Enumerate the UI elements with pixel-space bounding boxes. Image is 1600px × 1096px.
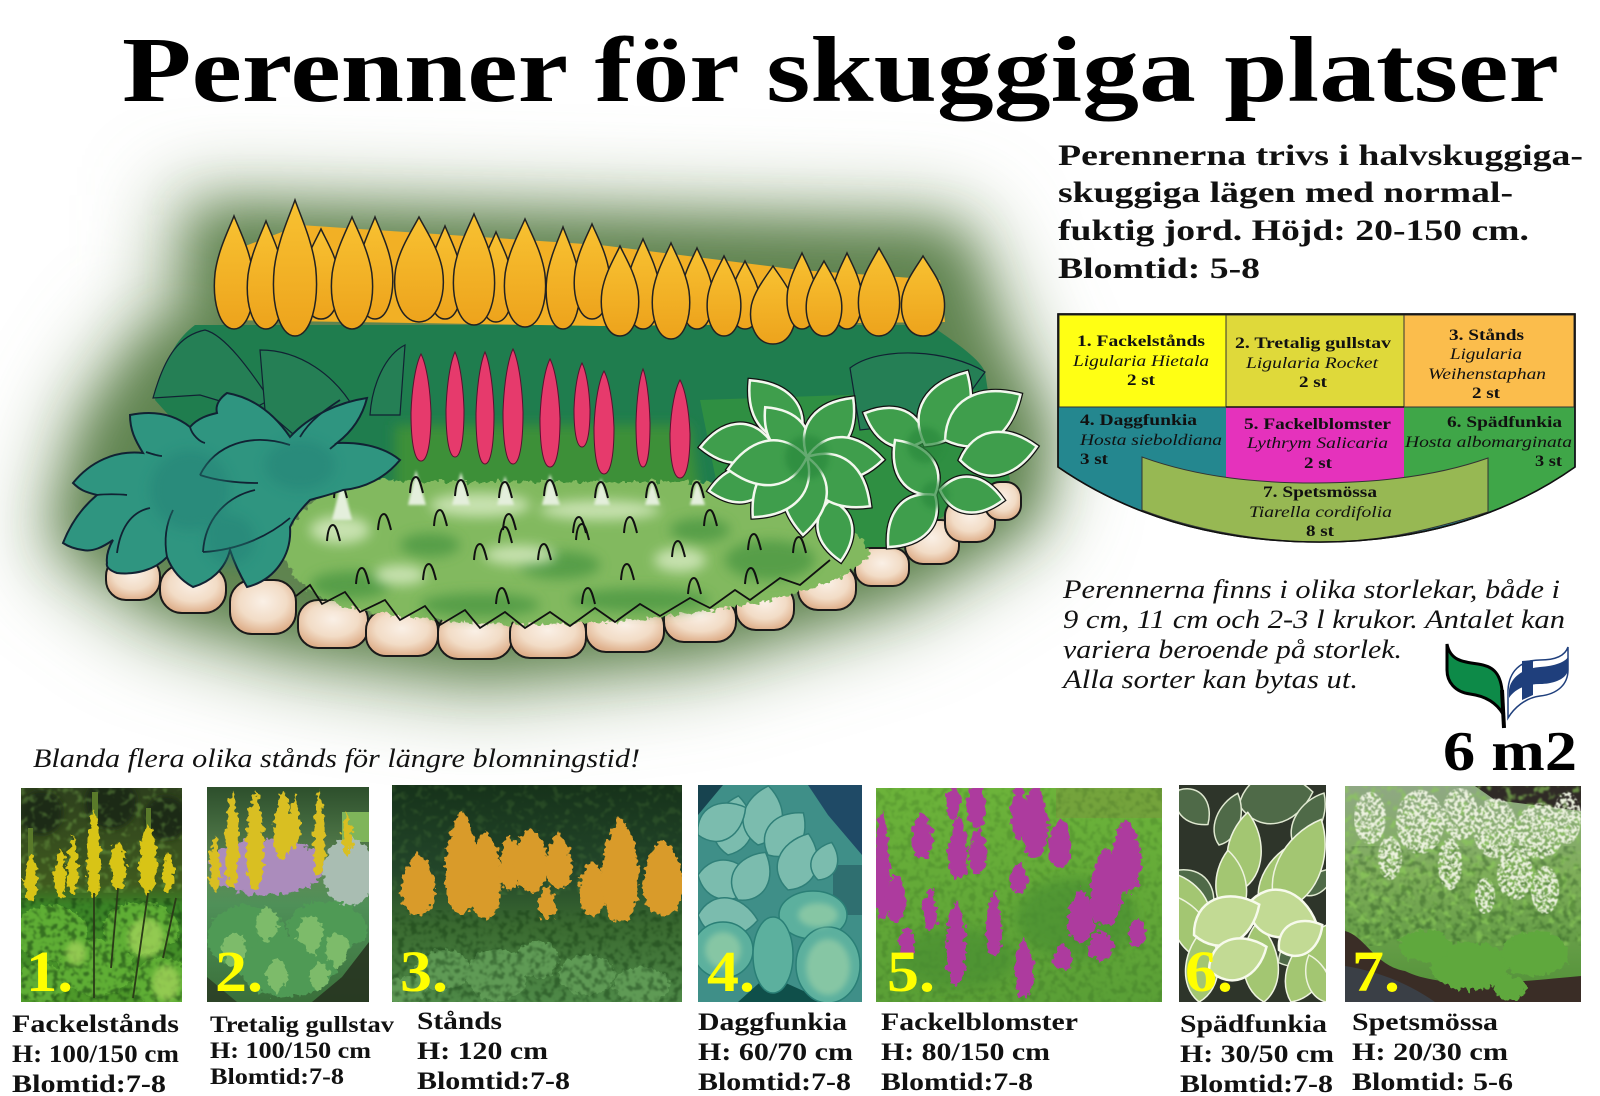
plan labels: Hosta albomarginata: [1404, 434, 1572, 451]
icon: leaf and Finnish flag logo: [1447, 644, 1568, 728]
photo 5: Fackelblomster: [874, 778, 1162, 1002]
mid green band: [395, 425, 700, 500]
bed 6 green: [1404, 407, 1574, 512]
photo 3: Stånds: [387, 785, 683, 1004]
plan labels: Ligularia: [1449, 346, 1522, 363]
caption 7: H: 20/30 cm: [1352, 1039, 1508, 1066]
caption 2: H: 100/150 cm: [210, 1038, 371, 1063]
size label: 6 m2: [1443, 721, 1577, 783]
caption 4: H: 60/70 cm: [698, 1039, 853, 1066]
plan labels: 6. Spädfunkia: [1447, 414, 1562, 431]
panel: intro text: skuggiga lägen med normal-: [1058, 176, 1513, 209]
photo numbers: 6.: [1185, 939, 1233, 1004]
plan labels: 8 st: [1306, 523, 1335, 540]
caption 6: H: 30/50 cm: [1180, 1041, 1334, 1068]
caption 3: Stånds: [417, 1008, 502, 1035]
note about pot sizes: Alla sorter kan bytas ut.: [1061, 665, 1358, 694]
photo numbers: 5.: [887, 939, 935, 1004]
planting plan diagram: [1058, 314, 1575, 542]
caption 4: Blomtid:7-8: [698, 1069, 851, 1096]
plan labels: 5. Fackelblomster: [1244, 416, 1391, 433]
plan labels: 3 st: [1535, 453, 1563, 470]
plan labels: 2. Tretalig gullstav: [1235, 335, 1391, 352]
plan labels: Ligularia Hietala: [1072, 353, 1209, 370]
photo 4: Daggfunkia: [689, 783, 862, 1003]
plan labels: Lythrym Salicaria: [1246, 435, 1388, 452]
soft green halo: [60, 215, 1040, 665]
caption 1: H: 100/150 cm: [12, 1041, 179, 1068]
dark hosta outlines at back: [153, 330, 985, 440]
plan labels: 2 st: [1472, 385, 1501, 402]
caption 5: Fackelblomster: [881, 1009, 1078, 1036]
plan labels: 3 st: [1080, 451, 1109, 468]
photo 7: Spetsmössa: [1345, 786, 1581, 1002]
plan outline: [1058, 314, 1575, 542]
dark green back band: [155, 325, 1000, 495]
photo numbers: 3.: [400, 939, 448, 1004]
caption 1: Fackelstånds: [12, 1011, 179, 1038]
photo numbers: [26, 939, 1400, 1004]
caption 2: Blomtid:7-8: [210, 1064, 344, 1089]
bed 3 orange: [1404, 315, 1574, 407]
plan labels: Ligularia Rocket: [1245, 355, 1379, 372]
caption 7: [1352, 1009, 1513, 1096]
outer pale halo: [40, 195, 1060, 695]
caption 1: [12, 1011, 179, 1096]
plan background shape: [1058, 314, 1575, 542]
caption 2: Tretalig gullstav: [210, 1012, 395, 1037]
caption 4: [698, 1009, 853, 1096]
photo numbers: 7.: [1352, 939, 1400, 1004]
plan labels: 2 st: [1304, 455, 1333, 472]
plan labels: 2 st: [1299, 374, 1328, 391]
tip text: Blanda flera olika stånds för längre blomningstid!: [33, 744, 640, 773]
note about pot sizes: Perennerna finns i olika storlekar, både i: [1062, 575, 1560, 604]
caption 6: Spädfunkia: [1180, 1011, 1328, 1038]
teal hosta: [63, 393, 400, 587]
right base foliage: [700, 390, 1010, 570]
caption 3: H: 120 cm: [417, 1038, 548, 1065]
plan labels: Weihenstaphan: [1428, 366, 1546, 383]
plan labels: 1. Fackelstånds: [1077, 333, 1205, 350]
pink flower spikes: [411, 349, 690, 478]
caption 7: Blomtid: 5-6: [1352, 1069, 1513, 1096]
caption 5: [881, 1009, 1078, 1096]
photo 2: Tretalig gullstav: [207, 787, 375, 1002]
bed 2 olive yellow: [1226, 315, 1404, 407]
caption 3: [417, 1008, 570, 1095]
photo 1: Fackelstånds: [15, 777, 189, 1009]
teal leaf shading: [150, 440, 335, 565]
photo 6: Spädfunkia: [1152, 768, 1344, 1010]
note about pot sizes: 9 cm, 11 cm och 2-3 l krukor. Antalet kan: [1063, 605, 1565, 634]
photo numbers: 4.: [707, 939, 755, 1004]
caption 4: Daggfunkia: [698, 1009, 848, 1036]
moss lower fringe: [296, 560, 830, 628]
caption 5: H: 80/150 cm: [881, 1039, 1050, 1066]
yellow band backing: [222, 225, 945, 326]
plan labels: Hosta sieboldiana: [1079, 432, 1222, 449]
plan labels: 7. Spetsmössa: [1263, 484, 1377, 501]
caption 7: Spetsmössa: [1352, 1009, 1499, 1036]
note about pot sizes: variera beroende på storlek.: [1063, 635, 1402, 664]
panel: intro text: Perennerna trivs i halvskuggiga-: [1058, 139, 1583, 172]
caption 3: Blomtid:7-8: [417, 1068, 570, 1095]
photo numbers: 2.: [215, 939, 263, 1004]
plan labels: [1072, 327, 1572, 540]
bed 7 moss: [1142, 457, 1488, 542]
bed 1 yellow: [1059, 315, 1226, 407]
plan labels: 4. Daggfunkia: [1080, 412, 1197, 429]
caption 5: Blomtid:7-8: [881, 1069, 1033, 1096]
bed 5 magenta: [1226, 407, 1404, 490]
plan labels: 2 st: [1127, 372, 1156, 389]
note about pot sizes: [1061, 575, 1565, 694]
plan labels: 3. Stånds: [1449, 327, 1524, 344]
moss carpet: [284, 470, 870, 628]
plan labels: Tiarella cordifolia: [1249, 504, 1392, 521]
title: Perenner för skuggiga platser: [122, 19, 1559, 122]
green hosta with white edges: [698, 361, 1041, 564]
photo numbers: 1.: [26, 939, 73, 1004]
border stones: [106, 482, 1021, 659]
panel: intro text: fuktig jord. Höjd: 20-150 cm.: [1058, 214, 1529, 247]
panel: intro text: Blomtid: 5-8: [1058, 252, 1260, 285]
illustration: garden bed sketch: [40, 195, 1060, 695]
caption 6: [1180, 1011, 1334, 1096]
caption 2: [210, 1012, 395, 1089]
yellow flower spikes: [214, 200, 945, 344]
panel: intro text: [1058, 139, 1583, 285]
